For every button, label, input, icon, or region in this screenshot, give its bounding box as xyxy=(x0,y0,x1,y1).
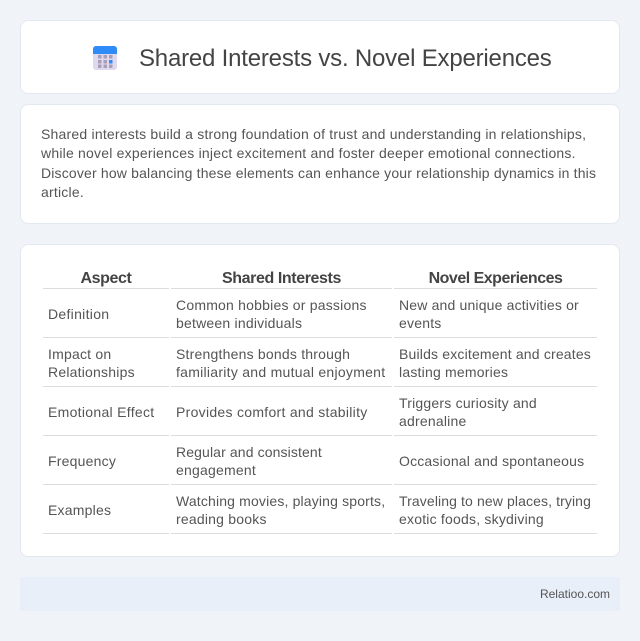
intro text: while novel experiences inject excitement and foster deeper emotional connections. xyxy=(41,145,576,161)
comparison table: Traveling to new places, trying xyxy=(399,493,591,509)
comparison table: lasting memories xyxy=(399,364,508,380)
comparison table: Common hobbies or passions xyxy=(176,297,367,313)
intro card xyxy=(20,104,620,224)
comparison table: adrenaline xyxy=(399,413,466,429)
table header: novel experiences: Novel Experiences xyxy=(429,270,562,287)
comparison table: Regular and consistent xyxy=(176,444,322,460)
comparison table: Relationships xyxy=(48,364,135,380)
intro text: article. xyxy=(41,184,84,200)
row: impact xyxy=(48,346,591,380)
comparison table: Emotional Effect xyxy=(48,404,154,420)
intro text: Shared interests build a strong foundation of trust and understanding in relationships, xyxy=(41,126,586,142)
comparison table: familiarity and mutual enjoyment xyxy=(176,364,385,380)
comparison table: Impact on xyxy=(48,346,111,362)
comparison table: events xyxy=(399,315,442,331)
footer text: Relatioo.com xyxy=(540,587,610,601)
comparison table: reading books xyxy=(176,511,267,527)
row: definition xyxy=(48,297,579,331)
comparison table: Provides comfort and stability xyxy=(176,404,368,420)
intro text xyxy=(41,126,596,200)
comparison table: Frequency xyxy=(48,453,116,469)
comparison table: Watching movies, playing sports, xyxy=(176,493,385,509)
comparison table: New and unique activities or xyxy=(399,297,579,313)
icon: calendar xyxy=(93,46,117,70)
comparison table: Occasional and spontaneous xyxy=(399,453,584,469)
comparison table: Examples xyxy=(48,502,111,518)
comparison table: exotic foods, skydiving xyxy=(399,511,544,527)
footer bar xyxy=(20,577,620,611)
comparison table: Strengthens bonds through xyxy=(176,346,350,362)
table header: shared interests: Shared Interests xyxy=(222,270,341,287)
header card xyxy=(20,20,620,94)
row: emotional effect xyxy=(48,395,537,429)
row: examples xyxy=(48,493,591,527)
comparison table: engagement xyxy=(176,462,256,478)
row: frequency xyxy=(48,444,584,478)
comparison table: between individuals xyxy=(176,315,302,331)
intro text: Discover how balancing these elements can enhance your relationship dynamics in this xyxy=(41,165,596,181)
comparison table: Triggers curiosity and xyxy=(399,395,537,411)
table header: aspect: Aspect xyxy=(81,270,131,287)
title: Shared Interests vs. Novel Experiences xyxy=(139,45,552,72)
comparison table: Builds excitement and creates xyxy=(399,346,591,362)
comparison table: Definition xyxy=(48,306,109,322)
table card xyxy=(20,244,620,557)
